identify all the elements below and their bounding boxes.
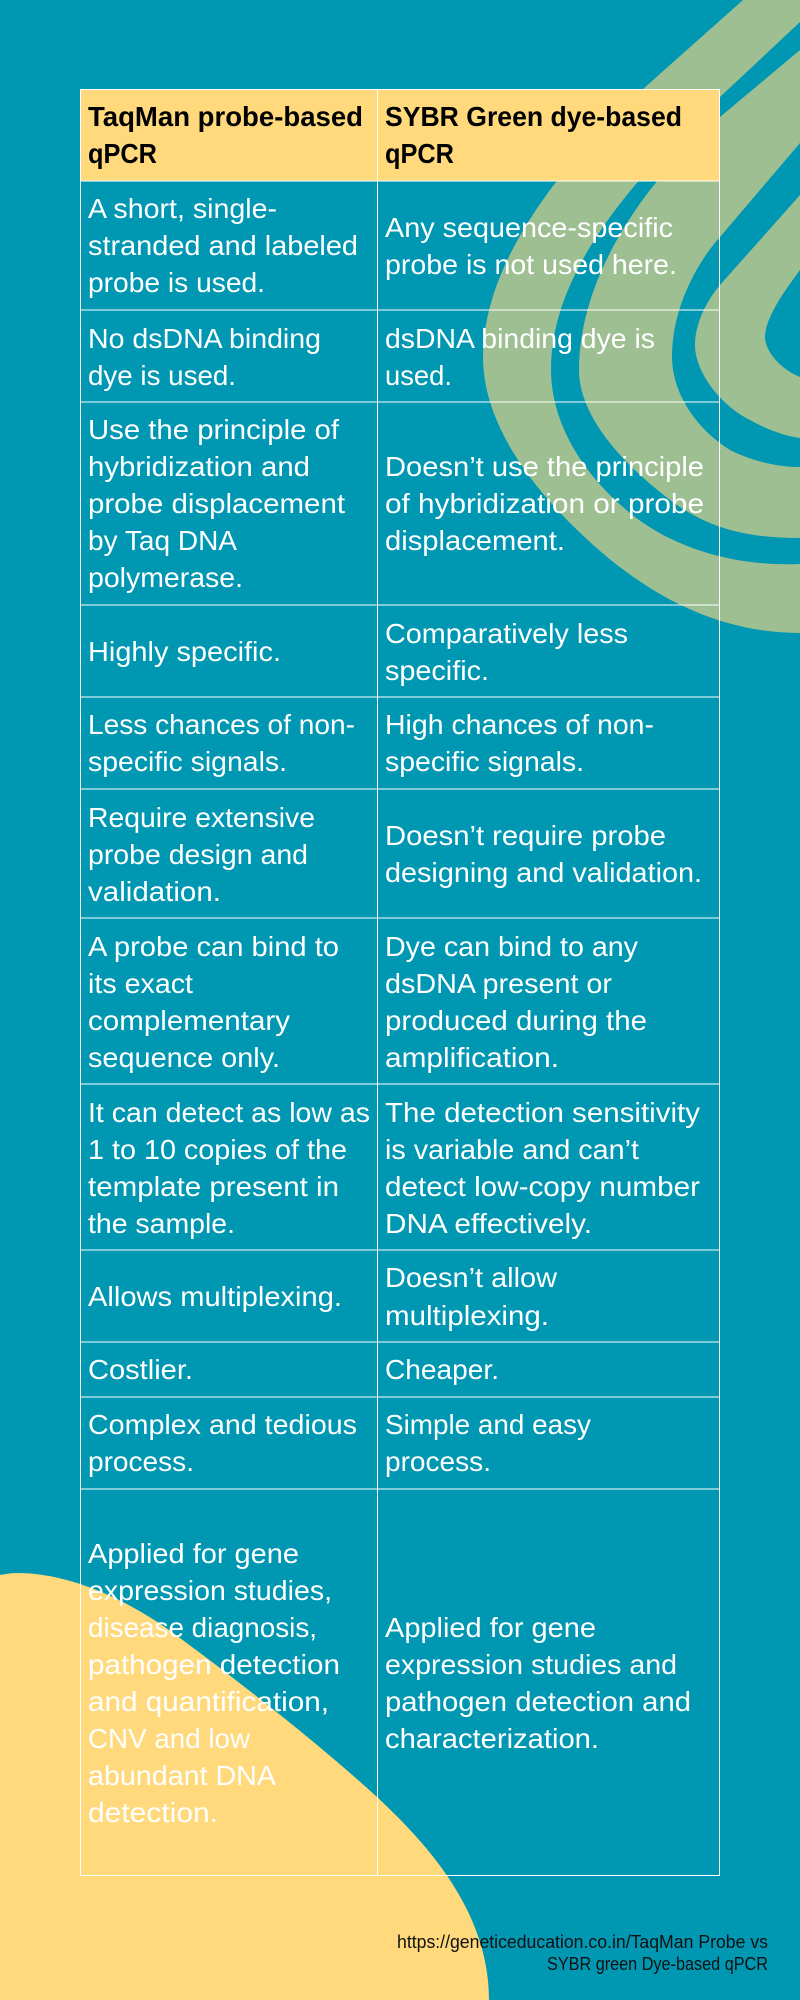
row 1: probe: probe is used.	[88, 267, 265, 298]
row 7: binding: sequence only.	[88, 1042, 280, 1073]
row 8: sensitivity: template present in	[88, 1171, 339, 1202]
row 7: binding: produced during the	[385, 1005, 647, 1036]
row 7: binding	[88, 931, 647, 1073]
row 7: binding: its exact	[88, 968, 193, 999]
header: SYBR Green: qPCR	[385, 138, 454, 169]
row 11: process	[88, 1409, 591, 1477]
row 12: applications: abundant DNA	[88, 1760, 276, 1791]
row 4: specificity: specific.	[385, 655, 489, 686]
row 11: process: Complex and tedious	[88, 1409, 357, 1440]
row 5: non-specific signals: specific signals.	[88, 746, 287, 777]
row 9: multiplexing: multiplexing.	[385, 1300, 549, 1331]
row 3: principle: displacement.	[385, 525, 565, 556]
row 12: applications: pathogen detection	[88, 1649, 340, 1680]
row 12: applications: detection.	[88, 1797, 218, 1828]
row 12: applications: disease diagnosis,	[88, 1612, 317, 1643]
row 6: probe design: validation.	[88, 876, 221, 907]
row 6: probe design: probe design and	[88, 839, 308, 870]
row 8: sensitivity	[88, 1097, 700, 1239]
row 3: principle: by Taq DNA	[88, 525, 237, 556]
row 2: dye: No dsDNA binding	[88, 323, 321, 354]
row 10: cost: Cheaper.	[385, 1354, 499, 1385]
row 5: non-specific signals: High chances of non-	[385, 709, 654, 740]
row 12: applications: characterization.	[385, 1723, 599, 1754]
source credit: SYBR green Dye-based qPCR	[547, 1953, 768, 1974]
row 7: binding: amplification.	[385, 1042, 559, 1073]
row 3: principle: hybridization and	[88, 451, 310, 482]
row 1: probe	[88, 193, 677, 298]
row 12: applications: pathogen detection and	[385, 1686, 691, 1717]
row 12: applications: expression studies,	[88, 1575, 332, 1606]
row 6: probe design: Doesn’t require probe	[385, 820, 666, 851]
source credit: https://geneticeducation.co.in/TaqMan Probe vs	[397, 1931, 768, 1952]
row 12: applications: and quantification,	[88, 1686, 329, 1717]
row 7: binding: A probe can bind to	[88, 931, 339, 962]
row 8: sensitivity: 1 to 10 copies of the	[88, 1134, 347, 1165]
row 12: applications: Applied for gene	[385, 1612, 596, 1643]
header: TaqMan	[88, 101, 363, 169]
row 1: probe: Any sequence-specific	[385, 212, 673, 243]
header: TaqMan: TaqMan probe-based	[88, 101, 363, 132]
row 11: process: process.	[88, 1446, 194, 1477]
table header background	[81, 90, 719, 181]
row 9: multiplexing	[88, 1262, 558, 1331]
row 8: sensitivity: It can detect as low as	[88, 1097, 370, 1128]
row 7: binding: dsDNA present or	[385, 968, 612, 999]
header: SYBR Green	[385, 101, 682, 169]
row 7: binding: complementary	[88, 1005, 290, 1036]
row 10: cost	[88, 1354, 499, 1385]
row 3: principle: polymerase.	[88, 562, 243, 593]
row 10: cost: Costlier.	[88, 1354, 193, 1385]
row 1: probe: probe is not used here.	[385, 249, 677, 280]
row 3: principle: of hybridization or probe	[385, 488, 704, 519]
row 4: specificity	[88, 618, 628, 686]
row 3: principle: Use the principle of	[88, 414, 339, 445]
row 8: sensitivity: the sample.	[88, 1208, 235, 1239]
row 6: probe design	[88, 802, 702, 907]
row 7: binding: Dye can bind to any	[385, 931, 638, 962]
header: SYBR Green: SYBR Green dye-based	[385, 101, 682, 132]
source credit	[397, 1931, 768, 1974]
table grid	[80, 90, 720, 1876]
row 5: non-specific signals: Less chances of non-	[88, 709, 355, 740]
row 3: principle: probe displacement	[88, 488, 345, 519]
row 12: applications: expression studies and	[385, 1649, 677, 1680]
row 12: applications	[88, 1538, 691, 1828]
row 11: process: Simple and easy	[385, 1409, 591, 1440]
row 9: multiplexing: Allows multiplexing.	[88, 1281, 342, 1312]
row 2: dye: dye is used.	[88, 360, 236, 391]
decorative yellow blob	[0, 1573, 489, 2000]
row 1: probe: A short, single-	[88, 193, 277, 224]
row 8: sensitivity: The detection sensitivity	[385, 1097, 700, 1128]
row 6: probe design: Require extensive	[88, 802, 315, 833]
header: TaqMan: qPCR	[88, 138, 157, 169]
row 2: dye: dsDNA binding dye is	[385, 323, 655, 354]
decorative green concentric bands	[483, 0, 800, 633]
row 9: multiplexing: Doesn’t allow	[385, 1262, 558, 1293]
row 5: non-specific signals: specific signals.	[385, 746, 584, 777]
row 4: specificity: Highly specific.	[88, 636, 281, 667]
row 8: sensitivity: DNA effectively.	[385, 1208, 592, 1239]
row 12: applications: CNV and low	[88, 1723, 251, 1754]
row 8: sensitivity: is variable and can’t	[385, 1134, 639, 1165]
row 5: non-specific signals	[88, 709, 654, 777]
row 4: specificity: Comparatively less	[385, 618, 628, 649]
row 6: probe design: designing and validation.	[385, 857, 702, 888]
row 12: applications: Applied for gene	[88, 1538, 299, 1569]
row 8: sensitivity: detect low-copy number	[385, 1171, 700, 1202]
row 2: dye: used.	[385, 360, 452, 391]
row 11: process: process.	[385, 1446, 491, 1477]
table header row	[88, 101, 682, 169]
row 1: probe: stranded and labeled	[88, 230, 358, 261]
row 3: principle	[88, 414, 704, 593]
row 2: dye	[88, 323, 655, 391]
row 3: principle: Doesn’t use the principle	[385, 451, 704, 482]
